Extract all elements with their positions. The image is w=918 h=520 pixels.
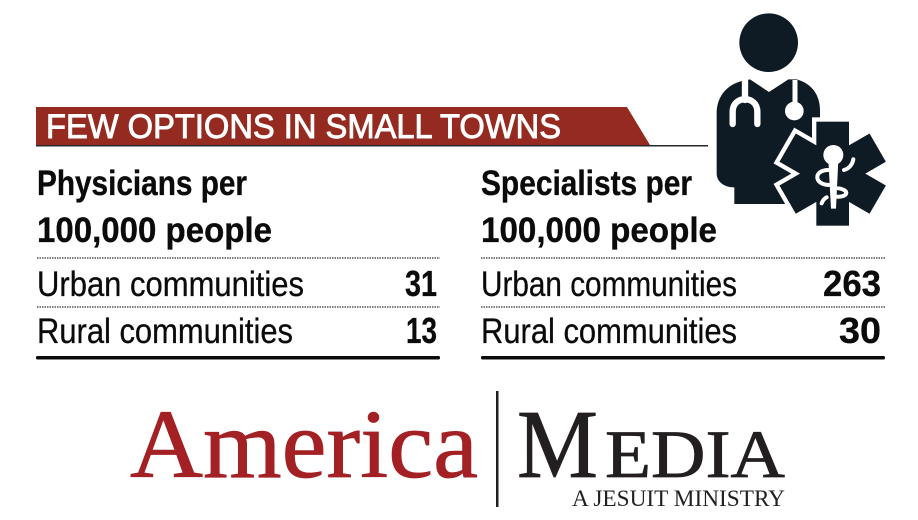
row: rural physicians: Rural communities <box>37 312 293 351</box>
row: rural specialists <box>481 310 881 351</box>
heading: specialists: Specialists per <box>481 164 692 203</box>
heading: physicians <box>37 164 272 250</box>
heading: physicians: Physicians per <box>37 164 247 203</box>
heading: physicians: 100,000 people <box>37 211 272 250</box>
heading: specialists: 100,000 people <box>481 211 717 250</box>
panel: physicians table <box>36 164 440 360</box>
banner heading: FEW OPTIONS IN SMALL TOWNS <box>46 108 561 146</box>
logo: America Media: EDIA <box>605 416 785 492</box>
row: rural specialists: 30 <box>839 310 881 351</box>
row: rural physicians <box>37 310 437 351</box>
logo: America Media <box>130 391 785 511</box>
logo: America Media: America <box>130 391 478 498</box>
panel: specialists table <box>481 164 885 360</box>
row: rural physicians: 13 <box>406 310 437 351</box>
icon: doctor with star of life <box>717 13 886 226</box>
row: urban physicians: 31 <box>405 263 437 304</box>
row: rural specialists: Rural communities <box>481 312 737 351</box>
row: urban physicians: Urban communities <box>37 265 304 304</box>
row: urban specialists: Urban communities <box>481 265 737 304</box>
logo: America Media: A JESUIT MINISTRY <box>572 486 785 511</box>
heading: specialists <box>481 164 717 250</box>
row: urban specialists: 263 <box>823 263 881 304</box>
logo: America Media: M <box>517 391 598 498</box>
